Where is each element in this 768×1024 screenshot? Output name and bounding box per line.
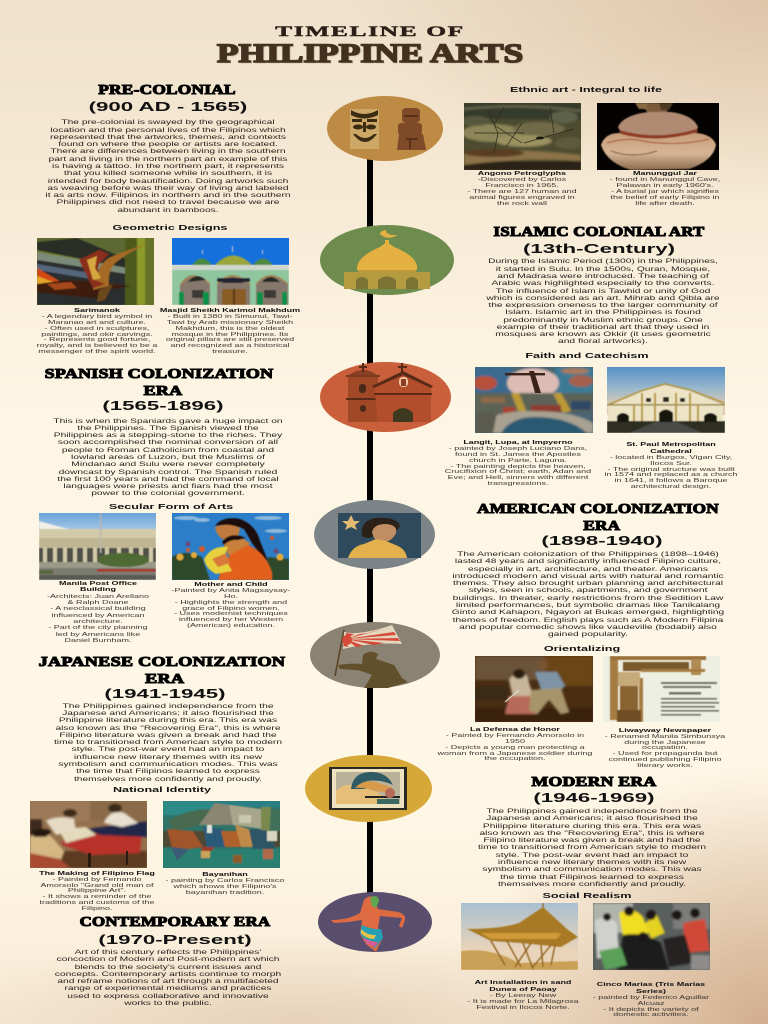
caption: Sarimanok: paintings, and okir carvings. [41,332,153,338]
caption: Sarimanok: Maranao art and culture. [48,320,146,326]
body text: symbolism and communication modes. This was [58,761,278,768]
subheading: orientalizing: Orientalizing [544,644,620,653]
caption: Langit: church in Parte, Laguna. [469,458,567,464]
caption: Mother and Child: - Highlights the strength and [175,600,287,606]
body text: it started in Sulu. In the 1500s, Quran, Mosque, [496,266,710,273]
caption: St. Paul [605,442,737,490]
body text: and Madrasa were introduced. The teaching of [497,273,709,280]
panel: pre-colonial [45,82,291,232]
heading: ISLAMIC COLONIAL ART [494,224,704,239]
caption: Manila Post Office: Building [80,587,116,593]
heading: SPANISH COLONIZATION [45,366,273,381]
body text: Arabic was highlighted especially to the converts. [492,280,714,287]
caption: Mother and Child: Ho. [224,594,238,600]
body text: the Philippines. The Spanish viewed the [77,425,259,432]
caption: Manunggul [610,171,720,207]
image: Manunggul Jar [597,103,719,170]
caption: Mother and Child: grace of Filipino women. [182,606,280,612]
date: (1565-1896) [102,399,224,413]
node: contemporary dancer icon [318,892,432,952]
heading [38,654,286,686]
body text: The Philippines gained independence from the [486,808,698,815]
body text: style. The post-war event had an impact to [72,746,264,753]
body text: mosques are known as Okkir (it uses geometric [495,331,711,338]
body text: abundant in bamboos. [117,207,219,214]
body text: concoction of Modern and Post-modern art which [57,956,279,963]
caption: St. Paul: - The original structure was built [607,466,735,472]
image: Liwayway Newspaper [603,656,720,722]
caption: Angono: the rock wall [497,201,547,207]
heading: ERA [145,671,184,686]
caption: Making of Flag: - Painted by Fernando [53,877,141,883]
body text: Islam. Islamic art in the Philippines is found [505,309,701,316]
body text: introduced modern and visual arts with natural and romantic [452,573,724,580]
panel: modern era [440,775,760,890]
body text: is having a tattoo. In the northern part, it represents [52,163,284,170]
body text [45,119,291,214]
panel: spanish colonization era [44,366,283,497]
date: (1946-1969) [533,791,655,805]
caption: Cinco Marias: - painted by Federico Aguillar [593,995,709,1001]
image: Langit, Lupa, at Impyerno [475,367,593,433]
caption: Angono [467,171,577,207]
body text [452,551,724,638]
caption: Masjid: treasure. [212,349,248,355]
body text: intended for body beautification. Doing artworks such [48,178,288,185]
body text: themes of freedom. English plays such as A Modern Filipina [453,617,723,624]
caption: Langit: Eve; and Hell, sinners with different [448,475,588,481]
image: St. Paul Metropolitan Cathedral [607,367,725,433]
title [216,24,524,68]
body text: symbolism and communication modes. This was [482,866,702,873]
date: (1898-1940) [541,534,663,548]
node: american woman portrait icon [314,500,435,569]
subheading: social realism: Social Realism [542,891,631,900]
body text: soon accomplished the nominal conversion of all [58,439,278,446]
caption: Liwayway: continued publishing Filipino [609,757,721,763]
body text: During the Islamic Period (1300) in the Philippines, [488,258,718,265]
heading: ERA [583,518,620,533]
heading: MODERN ERA [532,774,656,789]
caption: La Defensa: 1950 [505,739,525,745]
subheading: national identity: National Identity [113,785,211,794]
body text: Japanese and Americans; it also flourished the [486,815,698,822]
body text: Philippine literature during this era. This era was [483,823,701,830]
body text: and reframe notions of art through a multifaceted [57,978,279,985]
caption: Liwayway: - Renamed Manila Simbunsya [605,734,725,740]
date: (1941-1945) [104,687,226,701]
body text: influence new literary themes with its new [498,859,686,866]
caption: La Defensa: woman from a Japanese soldier during [438,750,592,756]
body text: the time that Filipinos learned to express [76,768,260,775]
body text: themes. They also brought urban planning and architectural [453,580,723,587]
caption: Art Installation: Dunes of Paoay [489,987,557,993]
caption: La Defensa [438,727,592,762]
caption: Sarimanok: - Often used in sculptures, [45,326,149,332]
caption: Sarimanok: messenger of the spirit world. [38,349,156,355]
node: islamic mosque icon [320,225,454,295]
caption: Bayanihan: Bayanihan [202,872,248,878]
title: PHILIPPINE ARTS [217,39,523,68]
image: Manila Post Office [39,513,156,580]
caption: Manila Post Office: led by Americans like [56,632,140,638]
body text [0,949,398,1007]
caption: Cinco Marias: - It depicts the variety of [603,1006,699,1012]
body text: Philippine literature during this era. This era was [59,717,277,724]
timeline spine [367,155,373,895]
body text: example of their traditional art that they used in [497,324,709,331]
caption: Manila Post Office: architecture. [73,619,123,625]
caption: Manunggul: Manunggul Jar [633,171,697,177]
heading: ERA [144,383,182,398]
body text: gained popularity. [548,631,628,638]
body text: Mindanao and Sulu were never completely [71,461,265,468]
caption: Langit: - painted by Joseph Luciano Dans, [449,446,587,452]
caption: Making of Flag [0,872,239,913]
body text: predominantly in Muslim ethnic groups. One [503,317,703,324]
caption: Mother and Child: Mother and Child [194,582,268,588]
caption: La Defensa: - Painted by Fernando Amorsolo in [446,733,584,739]
heading [476,501,720,533]
caption: Art Installation: - By Leeray New [490,993,556,999]
body text: especially in art, architecture, and theater. Americans [468,566,708,573]
caption: Angono: Angono Petroglyphs [478,171,566,177]
caption: Langit: transgressions. [488,481,548,487]
caption: Langit [445,440,591,487]
caption: St. Paul: in 1641, it follows a Baroque [615,478,727,484]
body text: Ginto and Kahapon, Ngayon at Bukas emerged, highlighting [452,609,724,616]
body text: and floral artworks). [558,338,648,345]
caption: Masjid: Makhdum, this is the oldest [176,326,284,332]
body text: languages were priests and fiars had the most [63,483,273,490]
body text: themselves more confidently and proudly. [498,881,686,888]
heading [44,366,274,398]
caption: Manila Post Office: & Ralph Doane [68,600,128,606]
caption: Manila Post Office: Daniel Burnham. [65,638,131,644]
caption: Liwayway: - Used for propaganda but [613,751,717,757]
body text: represented that the artworks, themes, and contexts [50,134,286,141]
caption: Bayanihan: - painting by Carlos Francisco [166,878,284,884]
title: TIMELINE OF [275,24,465,40]
caption: Manunggul: - A burial jar which signifies [611,189,719,195]
caption: Cinco Marias: domestic activities. [613,1012,689,1018]
body text: it as arts now. Filipinos in northern and in the southern [45,192,291,199]
body text: people to Roman Catholicism from coastal and [62,447,274,454]
body text: also known as the "Recovering Era", this is where [479,830,705,837]
caption: Angono: - There are 127 human and [467,189,577,195]
date: (13th-Century) [523,242,675,256]
body text: as weaving before was their way of living and labeled [47,185,289,192]
body text: styles, seen in schools, apartments, and government [469,587,707,594]
image: Cinco Marias [593,903,710,970]
subheading: faith and catechism: Faith and Catechism [525,351,649,360]
node: pre-colonial masks icon [327,96,443,161]
caption: Masjid: Tawi by Arab missionary Sheikh [167,320,293,326]
body text: The American colonization of the Philippines (1898–1946) [457,551,719,558]
caption: Masjid: and recognized as a historical [171,343,289,349]
panel: american colonization era [452,501,724,638]
caption: St. Paul: Ilocos Sur. [650,461,692,467]
caption: Making of Flag: Philippine Art". [68,888,126,894]
caption: St. Paul: Cathedral [650,449,692,455]
caption: Art Installation [381,980,665,1012]
body text: power to the colonial government. [91,490,245,497]
caption: Making of Flag: Amorsolo "Grand old man of [40,883,154,889]
caption: Angono: Francisco in 1965. [485,183,559,189]
image: Bayanihan [163,801,280,868]
caption: Liwayway: Liwayway Newspaper [619,728,711,734]
image: The Making of Filipino Flag [30,801,147,868]
body text: part and living in the northern part an example of this [49,156,287,163]
body text: The influence of Islam is Tawhid or unity of God [496,288,710,295]
caption: Angono: animal figures engraved in [469,195,575,201]
body text: lowland areas of Luzon, but the Muslims of [71,454,265,461]
subheading: ethnic art: Ethnic art - Integral to life [510,85,662,94]
caption: Sarimanok: royalty, and is believed to be a [37,343,157,349]
panel: japanese colonization era [38,654,286,782]
caption: Bayanihan [83,873,367,896]
body text: influence new literary themes with its new [74,754,262,761]
body text: This is when the Spaniards gave a huge impact on [53,418,283,425]
body text: Art of this century reflects the Philippines' [75,949,261,956]
caption: Manunggul: Palawan in early 1960's. [616,183,714,189]
caption: Masjid: - Built in 1380 in Simunul, Tawi- [167,314,293,320]
subheading: Geometric Designs [113,223,227,232]
caption: La Defensa: - Depicts a young man protecting a [445,745,585,751]
caption: Manunggul: - found in Manunggul Cave, [610,177,720,183]
body text [0,703,398,783]
caption: Masjid: original pillars are still preserved [166,337,294,343]
panel: islamic colonial art [486,224,720,345]
caption: Art Installation: Art Installation in sand [475,980,571,986]
node: japanese flag and soldier icon [310,622,440,688]
heading: CONTEMPORARY ERA [80,914,270,929]
caption: Mother and Child: influenced by her Western [179,617,283,623]
caption: Bayanihan: bayanihan tradition. [186,890,264,896]
caption: Masjid: Masjid Sheikh Karimol Makhdum [160,308,300,314]
image: La Defensa de Honor [475,656,593,722]
caption: La Defensa: La Defensa de Honor [470,727,560,733]
body text: the time that Filipinos learned to express [500,874,684,881]
caption: Manila Post Office: - Part of the city planning [48,625,148,631]
body text: Japanese and Americans; it also flourished the [62,710,274,717]
body text [362,808,768,888]
body text: blends to the society's current issues and [75,964,261,971]
caption: Art Installation: Festival in Ilocos Norte. [476,1005,570,1011]
date: (1970-Present) [98,933,252,947]
panel: contemporary era [0,915,330,1010]
body text: range of experimental mediums and practices [64,985,272,992]
body text [486,258,720,345]
body text: that you killed someone while in southern, it is [64,170,272,177]
caption: Manila Post Office: -Architects: Juan Arellano [47,594,149,600]
caption: Cinco Marias: Alcuaz [637,1001,664,1007]
caption: Masjid [160,308,300,355]
body text: The pre-colonial is swayed by the geographical [61,119,275,126]
caption: Making of Flag: - It shows a reminder of the [43,894,151,900]
caption: St. Paul: in 1574 and replaced as a church [605,472,737,478]
caption: Langit: found in St. James the Apostles [455,452,581,458]
heading: AMERICAN COLONIZATION [477,501,719,516]
caption: Mother and Child: (American) education. [187,623,275,629]
body text: and popular comedic shows like vaudeville (bodabil) also [459,624,717,631]
image: Angono Petroglyphs [464,103,581,170]
caption: Mother and Child [172,582,290,629]
caption: Cinco Marias [509,982,768,1019]
body text: There are differences between living in the southern [50,148,286,155]
body text: concepts. Contemporary artists continue to morph [55,971,281,978]
caption: Langit: Crucifixion of Christ; earth, Adan and [445,469,591,475]
body text: found on where the people or artists are located. [58,141,278,148]
body text: the expression oneness to the larger community of [488,302,718,309]
body text: themselves more confidently and proudly. [74,776,262,782]
caption: Bayanihan: which shows the Filipino's [173,884,277,890]
subheading: secular form of arts: Secular Form of Arts [109,502,233,511]
caption: Mother and Child: -Painted by Anita Magsaysay- [172,588,290,594]
image: Art Installation in sand [461,903,578,970]
caption: Sarimanok: Sarimanok [74,308,120,314]
body text: lasted 48 years and significantly influenced Filipino culture, [455,558,721,565]
caption: La Defensa: the occupation. [485,756,545,762]
body text: location and the personal lives of the Filipinos which [50,127,286,134]
body text: Philippines did not need to travel because we are [57,199,279,206]
caption: Making of Flag: Filipino. [81,906,112,912]
caption: Sarimanok: - Represents good fortune, [44,337,150,343]
caption: Art Installation: - It is made for La Milagrosa [467,999,579,1005]
heading: JAPANESE COLONIZATION [39,654,285,669]
body text: time to transitioned from American style to modern [54,739,282,746]
caption: Liwayway: literary works. [637,763,693,769]
caption: Manunggul: life after death. [635,201,695,207]
body text: Filipino literature was given a break and had the [59,732,277,739]
caption: Liwayway [605,728,726,769]
caption: Cinco Marias: Series) [636,989,666,995]
body text: buildings. In theater, early restrictions from the Sedition Law [453,595,723,602]
caption: Cinco Marias: Cinco Marias (Tris Marias [597,982,705,988]
body text: time to transitioned from American style to modern [478,844,706,851]
caption: Sarimanok [37,308,158,355]
caption: Making of Flag: The Making of Filipino Flag [39,871,155,877]
caption: Manila Post Office: - A neoclassical building [50,606,146,612]
body text: which is considered as an art. Mihrab and Qibla are [486,295,720,302]
caption: Masjid: mosque in the Philippines. Its [172,332,288,338]
caption: Manila Post Office: Manila Post Office [59,581,137,587]
body text: Philippines as a stepping-stone to the riches. They [54,432,282,439]
body text: works to the public. [124,1000,212,1007]
caption: Mother and Child: - Uses modernist techniques [174,611,288,617]
node: modern painting icon [305,755,432,822]
body text: style. The post-war event had an impact to [496,852,688,859]
body text: The Philippines gained independence from the [62,703,274,710]
caption: Langit: Langit, Lupa, at Impyerno [463,440,573,446]
body text: downcast by Spanish control. The Spanish ruled [59,469,277,476]
caption: St. Paul: architectural design. [631,484,711,490]
image: Sarimanok [37,238,154,305]
image: Mother and Child [172,513,289,580]
body text [53,418,283,497]
caption: Making of Flag: traditions and customs of the [40,900,154,906]
caption: Manila Post Office: influenced by American [52,613,144,619]
caption: Manila Post Office [47,581,149,644]
body text: used to express collaborative and innovative [67,993,269,1000]
node: spanish church icon [320,362,451,432]
caption: Langit: - The painting depicts the heaven, [450,464,586,470]
body text: also known as the "Recovering Era", this is where [55,725,281,732]
body text: the first 100 years and had the command of local [57,476,279,483]
caption: Sarimanok: - A legendary bird symbol in [42,314,152,320]
caption: Liwayway: during the Japanese [624,740,706,746]
caption: Angono: -Discovered by Carlos [478,177,566,183]
image: Masjid Sheikh Karimol Makhdum [172,238,289,305]
caption: Manunggul: the belief of early Filipino in [611,195,719,201]
heading: PRE-COLONIAL [98,82,236,97]
date: (900 AD - 1565) [89,100,247,114]
body text: Filipino literature was given a break and had the [483,837,701,844]
caption: St. Paul: - located in Burgos, Vigan City, [610,455,732,461]
caption: St. Paul: St. Paul Metropolitan [626,442,716,448]
body text: limited performances, but symbolic dramas like Tanikalang [456,602,720,609]
caption: Liwayway: occupation. [642,745,688,751]
